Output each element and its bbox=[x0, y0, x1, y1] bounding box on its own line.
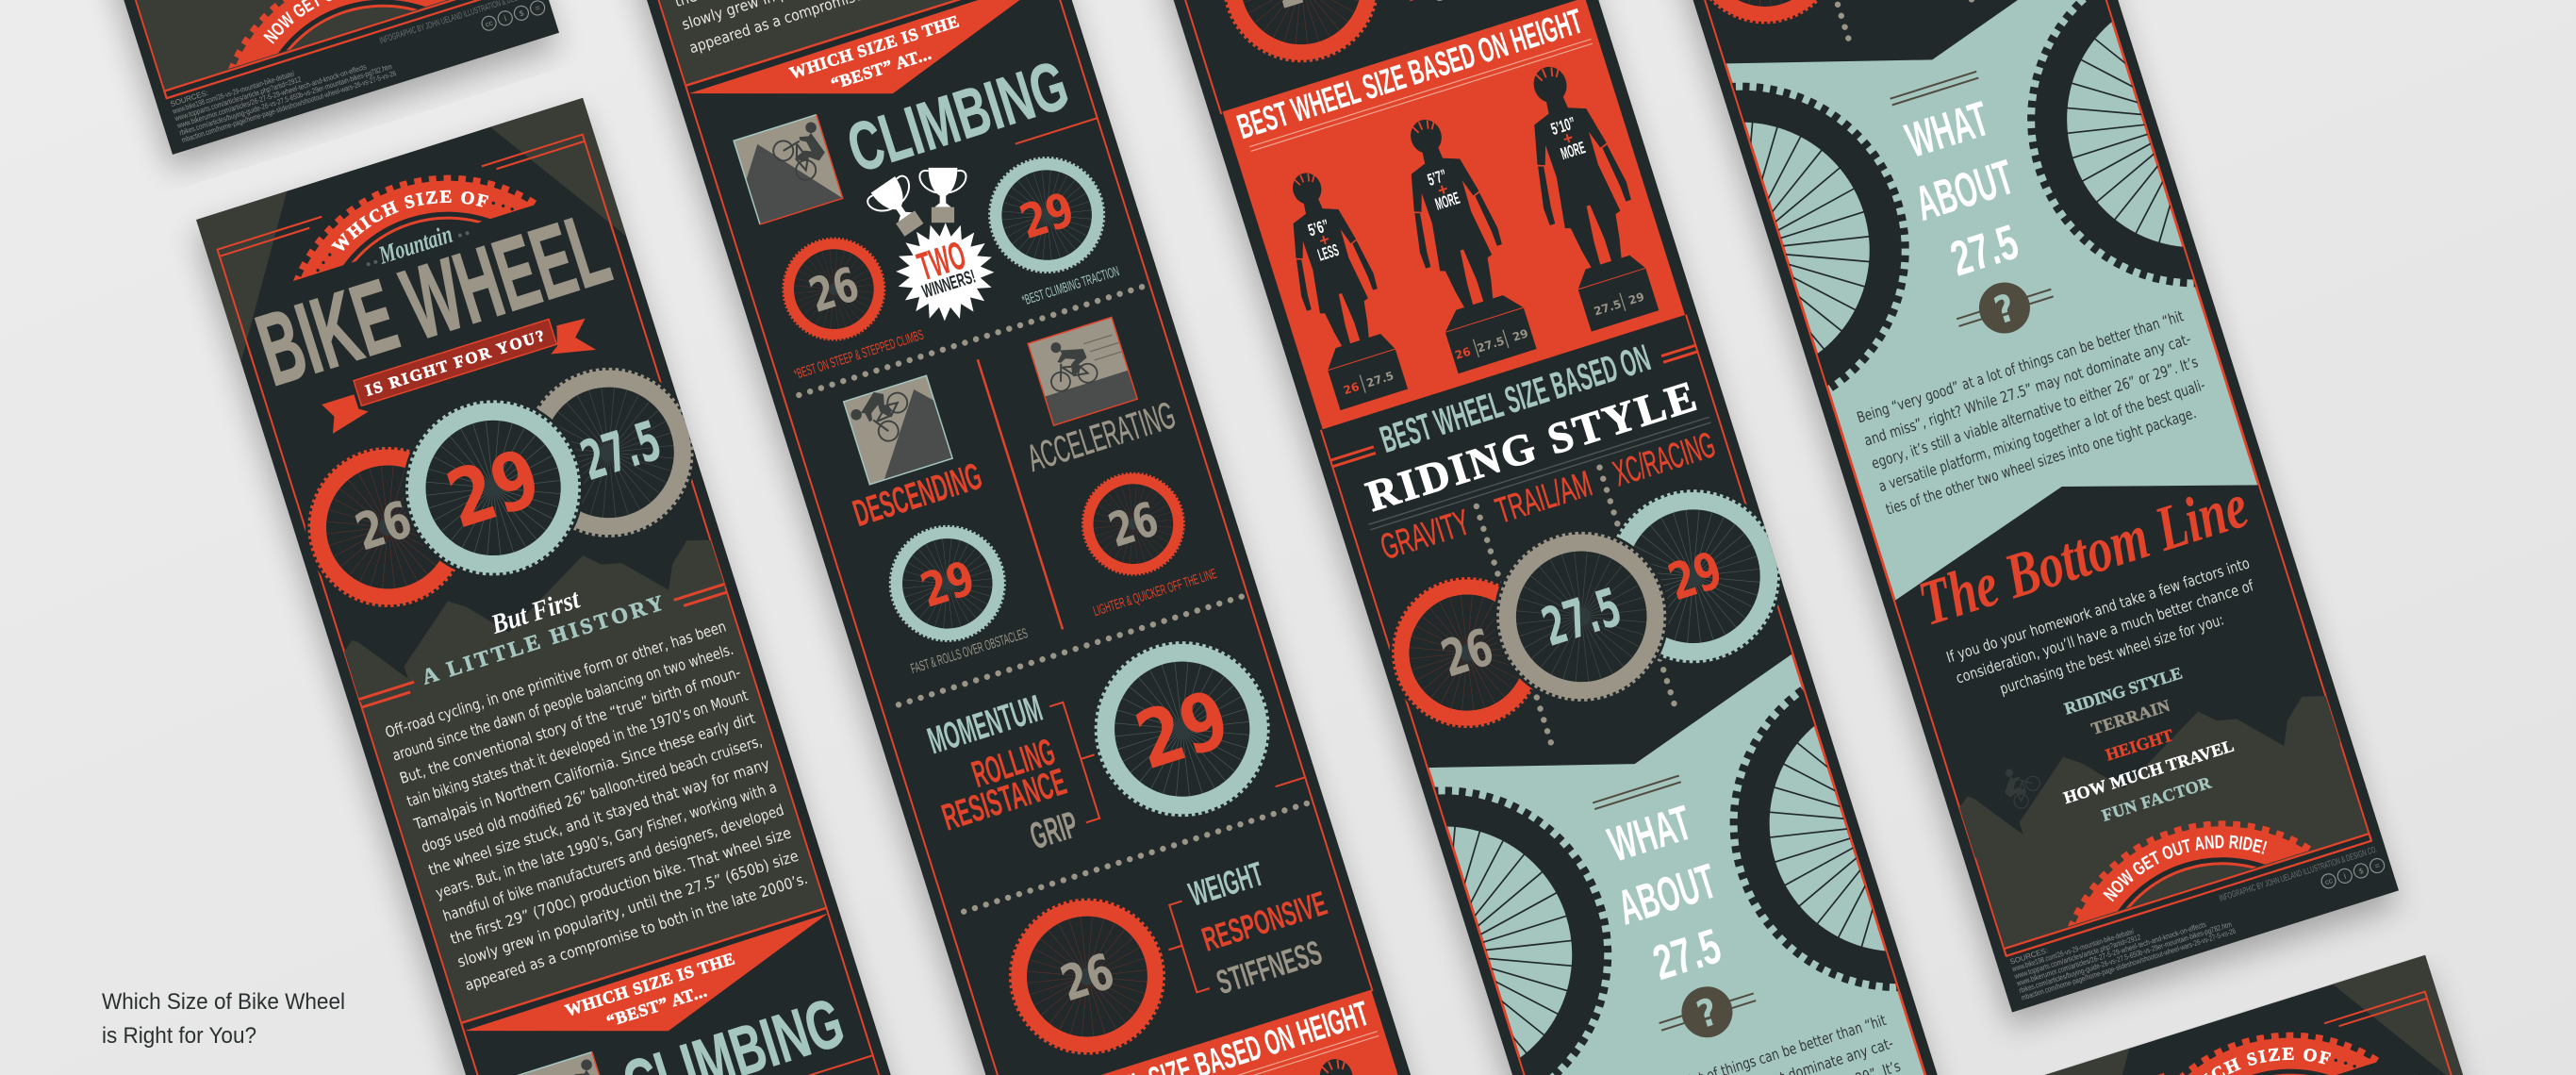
repeat: height section bbox=[1009, 990, 1471, 1075]
factor list: FUN FACTOR bbox=[2100, 772, 2214, 825]
column labels bbox=[1376, 425, 1720, 568]
badge: two winners: WINNERS! bbox=[920, 266, 978, 303]
factor list: TERRAIN bbox=[2089, 696, 2172, 738]
history body text: tain biking states that it developed in the 1970’s on Mount bbox=[405, 686, 750, 810]
sources: mbaction.com/home-page/home-page-slideshow/shootout-wheel-wars-26-vs-27-5-vs-26 bbox=[2021, 927, 2237, 1002]
list: 26 strengths: STIFFNESS bbox=[1212, 933, 1326, 1001]
figure: 5'7" and more: MORE bbox=[1433, 189, 1461, 214]
figure: 5'6" or less: + bbox=[1316, 229, 1331, 251]
section: descending to stiffness: 29 bbox=[1125, 672, 1240, 787]
column labels: GRAVITY bbox=[1376, 503, 1475, 568]
strip: bottom end of infographic, top left bbox=[0, 0, 619, 348]
section: banner and climbing: 26 bbox=[803, 256, 866, 323]
section: descending to stiffness: 26 bbox=[1102, 491, 1164, 558]
figure: 5'10" and more: 27.5 bbox=[1593, 297, 1623, 318]
arc dots bbox=[312, 196, 514, 273]
section: banner and climbing: 29 bbox=[1014, 182, 1081, 250]
body text: 27.5 bbox=[1855, 306, 2215, 519]
list: 29 strengths: MOMENTUM bbox=[923, 687, 1047, 762]
list: 26 strengths: WEIGHT bbox=[1184, 854, 1268, 914]
arc text: now get out and ride: NOW GET OUT AND RIDE! bbox=[2103, 835, 2267, 901]
wheel 26 bbox=[305, 447, 456, 607]
corner shading bbox=[196, 98, 628, 362]
heading: riding style: RIDING STYLE bbox=[1361, 372, 1702, 521]
history divider lines bbox=[359, 584, 727, 707]
credit line: INFOGRAPHIC BY JOHN UELAND ILLUSTRATION & DESIGN CO. bbox=[2218, 845, 2379, 904]
section: wheels and history bbox=[280, 339, 842, 1024]
red panel bbox=[1223, 0, 1685, 429]
heading: best wheel size based on: BEST WHEEL SIZE BASED ON bbox=[1376, 338, 1655, 461]
history body text: around since the dawn of people balancing on two wheels. bbox=[390, 640, 735, 765]
sources bbox=[2008, 890, 2237, 1002]
figure: 5'6" or less: LESS bbox=[1315, 240, 1341, 265]
icon: question mark bbox=[1950, 269, 2060, 347]
figure: 5'7" and more: 29 bbox=[1511, 326, 1530, 344]
repeat: teal section bbox=[1233, 589, 2164, 1075]
big wheels bbox=[1537, 0, 2400, 466]
banner text: “BEST” AT... bbox=[829, 44, 933, 93]
heading: accelerating: ACCELERATING bbox=[1023, 394, 1181, 480]
ribbon label bbox=[354, 319, 556, 405]
wheel 26 style bbox=[1370, 555, 1564, 750]
list: 26 strengths bbox=[1183, 838, 1345, 1002]
figure: 5'10" and more: MORE bbox=[1559, 138, 1588, 163]
wheel labels: 26 bbox=[349, 489, 419, 562]
body text: 27.5: egory, it’s still a viable alternative to either 26” or 29”. It’s bbox=[1869, 353, 2200, 472]
sources: SOURCES: bbox=[2009, 946, 2049, 967]
factor list bbox=[2036, 655, 2245, 835]
history body text: dogs used old modified 26” balloon-tired beach cruisers, bbox=[419, 732, 765, 856]
list: 26 strengths: RESPONSIVE bbox=[1197, 884, 1331, 959]
section: descending to stiffness: 29 bbox=[915, 551, 982, 619]
body text: 27.5: Being “very good” at a lot of things can be better than “hit bbox=[1855, 306, 2186, 426]
sources: www.bikerumor.com/articles/26-27-5-29-wheel-tech-and-knock-on-effects bbox=[2015, 920, 2207, 988]
heading: what about 27.5: 27.5 bbox=[1944, 215, 2024, 287]
heading: climbing: CLIMBING bbox=[839, 46, 1077, 188]
ribbon tails bbox=[321, 317, 596, 435]
body text: 27.5: ties of the other two wheel sizes into one tight package. bbox=[1884, 404, 2198, 519]
wheel 27.5 style bbox=[1472, 507, 1691, 726]
history body text: the wheel size stuck, and it stayed that way for many bbox=[426, 754, 771, 879]
teal panel bbox=[1726, 0, 2258, 601]
gear arc heading bbox=[244, 137, 652, 545]
history body text: the first 29” (700c) production bike. That wheel size bbox=[448, 823, 793, 948]
icon: descending rider bbox=[834, 362, 952, 486]
rider silhouette bbox=[1992, 761, 2042, 811]
dotted column dividers bbox=[1477, 468, 1676, 749]
figure: 5'6" or less: 5’6” bbox=[1306, 216, 1331, 240]
red frame lines bbox=[218, 135, 1636, 1075]
sources: rbikes.com/articles/buying-guide-26-vs-27.5-650b-vs-29er-mountain-bikes-pg782.htm bbox=[2018, 920, 2233, 995]
title: bike wheel: BIKE WHEEL bbox=[244, 190, 621, 407]
figure: 5'7" and more: + bbox=[1435, 179, 1450, 200]
history body text: slowly grew in popularity, until the 27.5” (650b) size bbox=[455, 847, 801, 971]
caption: project title bbox=[102, 989, 345, 1049]
wheel labels: 29 bbox=[437, 431, 551, 547]
wheel 29 style bbox=[1581, 464, 1806, 688]
section: what about 27.5 bbox=[1530, 0, 2462, 662]
body text: bottom line: purchasing the best wheel size for you: bbox=[1998, 610, 2226, 698]
body text: 27.5: and miss”, right? While 27.5” may not dominate any cat- bbox=[1862, 330, 2193, 450]
wheel 29 bbox=[404, 400, 584, 575]
badge: two winners: TWO bbox=[913, 232, 970, 289]
strip 1: header, wheels, history bbox=[184, 98, 902, 1075]
licence icons: i bbox=[2342, 871, 2347, 881]
wheel 29 descending bbox=[872, 508, 1023, 659]
wheel 29 large bbox=[1069, 616, 1296, 842]
body text: bottom line: If you do your homework and take a few factors into bbox=[1944, 554, 2252, 667]
history body text: handful of bike manufacturers and designers, developed bbox=[440, 801, 786, 925]
script heading: the bottom line: The Bottom Line bbox=[1910, 469, 2255, 639]
subtitle: IS RIGHT FOR YOU? bbox=[363, 326, 547, 400]
list: 29 strengths: RESISTANCE bbox=[937, 761, 1071, 839]
figure: 5'6" or less: 26 bbox=[1342, 380, 1361, 397]
caption: project title: Which Size of Bike Wheel bbox=[102, 989, 345, 1015]
licence icons: $ bbox=[2358, 867, 2365, 876]
factor list: HOW MUCH TRAVEL bbox=[2061, 736, 2237, 807]
history body text bbox=[382, 617, 810, 995]
wheel 27.5 bbox=[537, 368, 696, 538]
body text: bottom line: consideration, you’ll have a much better chance of bbox=[1954, 576, 2256, 687]
list: 29 strengths: ROLLING bbox=[967, 731, 1060, 796]
mountains repeat bbox=[1954, 673, 2340, 858]
heading: what about 27.5: ABOUT bbox=[1909, 150, 2021, 232]
heading: what about 27.5: WHAT bbox=[1900, 91, 1995, 169]
history body text: But, the conventional story of the “true” birth of moun- bbox=[397, 663, 743, 787]
figure: 5'7" and more: 27.5 bbox=[1476, 334, 1506, 356]
section: title block bbox=[196, 98, 626, 434]
section: riding style: 27.5 bbox=[1535, 577, 1628, 659]
repeat: banner and climbing bbox=[462, 907, 872, 1075]
figure: 5'6" or less: 27.5 bbox=[1364, 369, 1395, 390]
history panel bbox=[360, 585, 825, 1023]
section: height bbox=[1223, 0, 1685, 429]
heading: descending: DESCENDING bbox=[849, 455, 986, 535]
figure: 5'7" and more bbox=[1382, 108, 1537, 373]
licence icons bbox=[2320, 857, 2386, 890]
figure: 5'7" and more: 5’7” bbox=[1426, 166, 1449, 190]
section: banner and climbing bbox=[686, 0, 1149, 399]
figure: 5'6" or less bbox=[1266, 162, 1410, 411]
banner rule bbox=[686, 0, 1050, 86]
caption: project title: is Right for You? bbox=[102, 1023, 256, 1049]
column labels: XC/RACING bbox=[1610, 425, 1720, 494]
wheel labels bbox=[355, 420, 660, 550]
mountains bbox=[339, 518, 725, 702]
section: descending to stiffness: LIGHTER & QUICKER OFF THE LINE bbox=[1091, 566, 1218, 620]
wheel labels: 27.5 bbox=[573, 408, 669, 493]
figure: 5'10" and more bbox=[1503, 55, 1666, 334]
banner text: WHICH SIZE IS THE bbox=[787, 11, 961, 83]
section: riding style: 29 bbox=[1661, 540, 1729, 612]
heading: what about 27.5 bbox=[1891, 90, 2039, 292]
factor list: HEIGHT bbox=[2104, 725, 2175, 765]
gear arc: get out and ride bbox=[2019, 783, 2426, 1075]
icon: question mark: ? bbox=[1990, 286, 2021, 333]
section: descending to stiffness bbox=[802, 289, 1367, 1075]
small stars beside mountain bbox=[366, 231, 470, 267]
section: riding style: 26 bbox=[1434, 618, 1500, 689]
banner shape bbox=[688, 0, 1072, 152]
wheel 26 accelerating bbox=[1066, 457, 1200, 591]
strip 3: height, riding style bbox=[451, 0, 2293, 1075]
figure: 5'10" and more: 5’10” bbox=[1548, 113, 1577, 139]
wheel 29 climbing bbox=[971, 140, 1122, 290]
list: 29 strengths: GRIP bbox=[1025, 803, 1082, 857]
wheel 26 climbing bbox=[767, 223, 900, 356]
history body text: years. But, in the late 1990’s, Gary Fisher, working with a bbox=[434, 778, 779, 902]
list: 29 strengths bbox=[914, 687, 1084, 881]
factor list: RIDING STYLE bbox=[2062, 663, 2185, 719]
script: but first: But First bbox=[487, 584, 584, 640]
section: bottom line bbox=[1920, 496, 2386, 1001]
licence icons: cc bbox=[2324, 876, 2334, 886]
bracket: 26 list bbox=[1156, 901, 1210, 997]
bracket: 29 list bbox=[1049, 698, 1113, 822]
sources: www.topparts.com/articles/article.php?artid=2912 bbox=[2013, 933, 2142, 981]
strip 2: climbing to stiffness bbox=[623, 0, 1422, 1075]
heading: a little history: A LITTLE HISTORY bbox=[419, 590, 667, 689]
strip 4: what about 27.5, bottom line bbox=[1669, 0, 2408, 1038]
figure: 5'10" and more: + bbox=[1560, 128, 1576, 149]
lower olive ground bbox=[1976, 742, 2369, 949]
sources: www.bike198.com/26-vs-29-mountain-bike-debate/ bbox=[2010, 927, 2136, 973]
section: descending to stiffness: 26 bbox=[1054, 944, 1121, 1013]
icon: climbing rider bbox=[732, 106, 855, 224]
trophies bbox=[864, 172, 933, 243]
figure: 5'7" and more: 26 bbox=[1453, 345, 1472, 362]
history body text: appeared as a compromise to both in the late 2000’s. bbox=[463, 869, 810, 994]
arc text: which size of: WHICH SIZE OF bbox=[331, 190, 488, 251]
captions: descending and accelerating: FAST & ROLLS OVER OBSTACLES bbox=[909, 625, 1030, 677]
column labels: TRAIL/AM bbox=[1492, 464, 1596, 532]
history body text: Off-road cycling, in one primitive form or other, has been bbox=[383, 618, 728, 741]
strip: top of infographic repeat, bottom right bbox=[2033, 955, 2576, 1075]
body text: 27.5: a versatile platform, mixing together a lot of the best quali- bbox=[1876, 375, 2207, 495]
captions: climbing: *BEST ON STEEP & STEPPED CLIMBS bbox=[792, 327, 926, 383]
figure: 5'10" and more: 29 bbox=[1627, 290, 1646, 307]
script word: mountain: Mountain bbox=[374, 220, 455, 270]
licence icons: = bbox=[2373, 860, 2381, 871]
icon: accelerating rider bbox=[1028, 317, 1137, 425]
wheel 26 large bbox=[986, 875, 1188, 1075]
frame base lines bbox=[2004, 834, 2371, 956]
history body text: Tamalpais in Northern California. Since these early dirt bbox=[411, 709, 757, 834]
section: banner and climbing: *BEST CLIMBING TRACTION bbox=[1020, 263, 1121, 309]
section: riding style bbox=[1318, 318, 1815, 788]
badge: two winners bbox=[883, 210, 1007, 334]
